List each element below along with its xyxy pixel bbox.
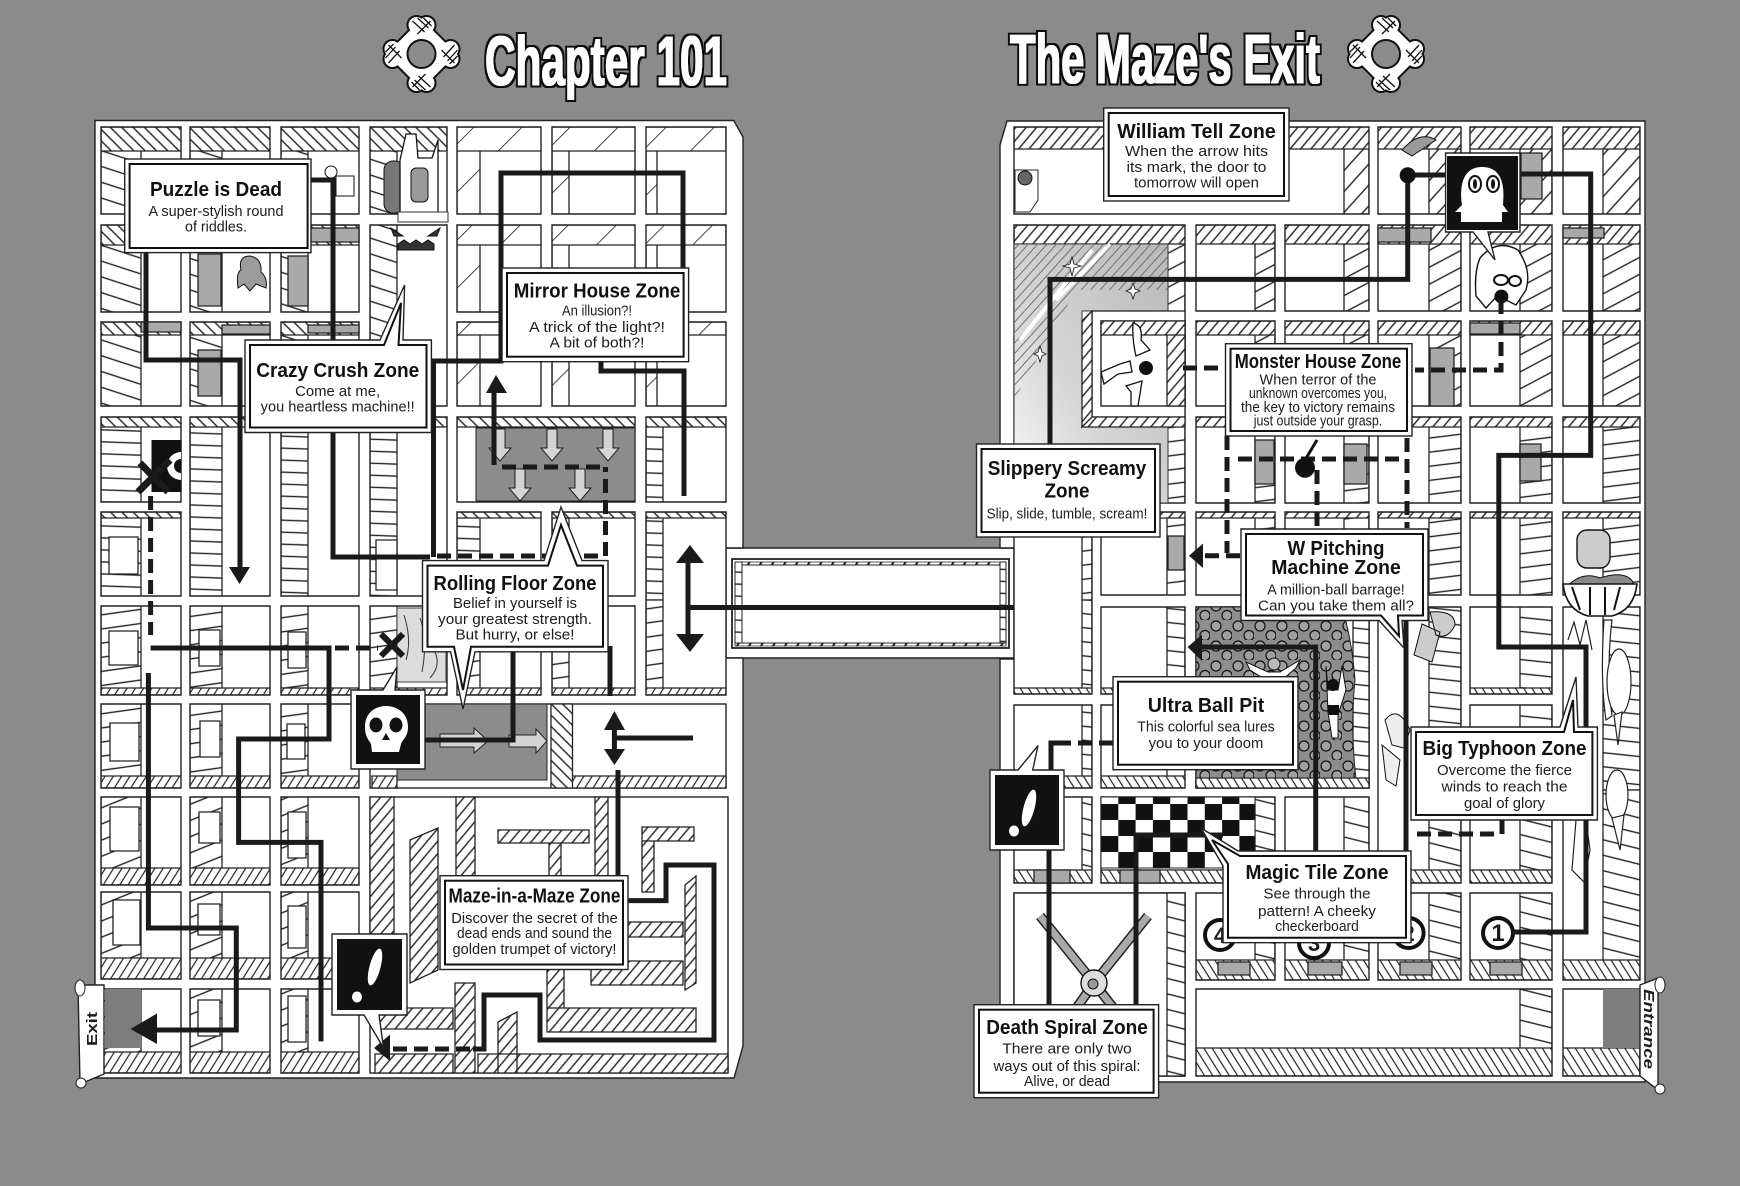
callout: Puzzle is Dead — [125, 159, 311, 253]
callout: Death Spiral Zone: There are only two — [1002, 1042, 1132, 1058]
callout: Big Typhoon Zone — [1411, 677, 1597, 820]
callout: William Tell Zone: tomorrow will open — [1134, 176, 1259, 192]
callout: Maze-in-a-Maze Zone: golden trumpet of victory! — [452, 942, 616, 958]
icon: octopus skull — [1476, 246, 1528, 308]
callout: Mirror House Zone: A bit of both?! — [550, 336, 644, 352]
route arrowheads right maze — [1188, 544, 1203, 661]
X mark drawn over the black marker — [138, 460, 170, 492]
callout: Crazy Crush Zone: Come at me, — [295, 384, 380, 400]
exit room shadow — [105, 989, 141, 1048]
callout: Monster House Zone: just outside your grasp. — [1253, 414, 1382, 430]
callout: Slippery Screamy Zone: Zone — [1044, 480, 1090, 502]
callout: Puzzle is Dead: Puzzle is Dead — [150, 179, 282, 201]
icon: grinning wall monster — [391, 228, 440, 250]
ball pit floor — [1196, 607, 1369, 788]
callout: Big Typhoon Zone: Overcome the fierce — [1437, 763, 1572, 779]
checkerboard tile floor — [1101, 797, 1255, 868]
callout: Slippery Screamy Zone: Slip, slide, tumble, scream! — [987, 507, 1147, 523]
route lines left maze — [146, 173, 714, 1049]
maze outer slab — [1000, 121, 1645, 1082]
rolling floor room lower — [370, 704, 726, 788]
numbered switches — [1205, 918, 1513, 958]
route line across the bridge — [688, 605, 1044, 610]
exit tab: Exit — [84, 1012, 101, 1046]
apple on shelf — [1015, 170, 1038, 212]
rolling floor room upper — [476, 428, 635, 501]
icon: exclamation marker left — [332, 934, 407, 1048]
callout: Magic Tile Zone: pattern! A cheeky — [1258, 904, 1377, 920]
numbered switches: 1 — [1491, 920, 1505, 947]
maze outer slab — [95, 120, 743, 1078]
icon: switch cube — [325, 166, 354, 196]
callout: Magic Tile Zone — [1201, 828, 1411, 943]
callout: W Pitching Machine Zone: Can you take them all? — [1258, 598, 1414, 614]
callout: Rolling Floor Zone: your greatest strength. — [438, 612, 592, 628]
panel: bridge connecting the two maze halves — [726, 548, 1014, 658]
callout: Death Spiral Zone: Alive, or dead — [1024, 1074, 1110, 1090]
callout: Crazy Crush Zone: you heartless machine!! — [261, 399, 415, 415]
route arrowheads and X mark left maze — [130, 375, 704, 1061]
callout: William Tell Zone: William Tell Zone — [1117, 121, 1276, 143]
numbered switches: 4 — [1214, 923, 1227, 948]
swimmers in the ball pit — [1246, 658, 1346, 738]
callout: Big Typhoon Zone: winds to reach the — [1440, 780, 1568, 796]
callout: Slippery Screamy Zone: Slippery Screamy — [988, 458, 1147, 480]
route lines right maze — [1049, 167, 1591, 1005]
panel: right maze half — [1000, 120, 1645, 1082]
icon: black marker with circle behind the X — [152, 440, 182, 492]
callout: Maze-in-a-Maze Zone — [440, 876, 628, 970]
entrance tab: Entrance — [1640, 989, 1657, 1069]
callout: Slippery Screamy Zone — [976, 444, 1160, 537]
slippery mirror floor — [1014, 244, 1168, 503]
callout: Monster House Zone: unknown overcomes you, — [1249, 386, 1387, 402]
entrance tab — [1640, 977, 1665, 1094]
callout: Big Typhoon Zone: goal of glory — [1464, 796, 1546, 812]
exit tab — [75, 980, 104, 1088]
callout: W Pitching Machine Zone — [1241, 529, 1428, 648]
callout: Rolling Floor Zone: Rolling Floor Zone — [434, 573, 596, 595]
callout: Mirror House Zone: A trick of the light?! — [529, 320, 665, 336]
callout: Magic Tile Zone: See through the — [1264, 887, 1370, 903]
callout: Crazy Crush Zone: Crazy Crush Zone — [256, 360, 419, 382]
callout: Magic Tile Zone: checkerboard — [1275, 919, 1359, 935]
inner maze-in-a-maze room — [370, 797, 728, 1073]
grey doors and ledges — [1034, 153, 1604, 975]
icon: ghost marker — [1446, 153, 1520, 260]
icon: skull marker — [351, 667, 425, 769]
callout: Magic Tile Zone: Magic Tile Zone — [1246, 862, 1388, 884]
callout: Death Spiral Zone: Death Spiral Zone — [986, 1017, 1148, 1039]
callout: W Pitching Machine Zone: A million-ball barrage! — [1267, 582, 1405, 598]
callout: Death Spiral Zone — [974, 1005, 1159, 1098]
callout: Maze-in-a-Maze Zone: Maze-in-a-Maze Zone — [448, 886, 620, 908]
room grid with hatched walls — [1014, 120, 1640, 1076]
callout: Monster House Zone: When terror of the — [1260, 373, 1376, 389]
falling players and equipment — [1382, 612, 1455, 786]
window panels on side walls — [109, 537, 397, 1042]
emblem: clasped hands left — [384, 17, 458, 91]
room grid with hatched walls — [101, 120, 726, 1080]
callout: Death Spiral Zone: ways out of this spiral: — [992, 1059, 1140, 1075]
numbered switches: 2 — [1402, 921, 1415, 946]
callout: Mirror House Zone — [502, 268, 689, 362]
emblem: clasped hands right — [1349, 17, 1423, 91]
icon: robot on tyre — [384, 134, 448, 222]
numbered switches: 3 — [1308, 931, 1320, 956]
callout: Crazy Crush Zone — [245, 285, 431, 432]
monster house inner room — [1082, 311, 1185, 427]
callout: Rolling Floor Zone: Belief in yourself is — [453, 596, 577, 612]
callout: Big Typhoon Zone: Big Typhoon Zone — [1422, 738, 1586, 760]
callout: Ultra Ball Pit: Ultra Ball Pit — [1148, 695, 1265, 717]
title: Chapter 101: Chapter 101 — [485, 22, 727, 100]
title: The Maze's Exit: The Maze's Exit — [1010, 20, 1320, 98]
callout: Ultra Ball Pit — [1113, 677, 1298, 770]
callout: Monster House Zone: the key to victory remains — [1241, 400, 1395, 416]
typhoon wind blobs — [1568, 620, 1631, 882]
death spiral room — [1014, 893, 1185, 1076]
callout: W Pitching Machine Zone: W Pitching — [1288, 538, 1384, 560]
callout: Ultra Ball Pit: This colorful sea lures — [1137, 719, 1275, 735]
entrance room shadow — [1603, 989, 1640, 1048]
callout: Mirror House Zone: An illusion?! — [562, 304, 632, 320]
icon: splat blob — [237, 256, 266, 291]
grey doors — [141, 228, 359, 396]
icon: exclamation marker right — [990, 746, 1064, 850]
callout: Rolling Floor Zone: But hurry, or else! — [456, 628, 574, 644]
panel: left maze half — [95, 120, 743, 1080]
callout: Monster House Zone — [1226, 344, 1412, 436]
water splash floor — [397, 608, 446, 682]
callout: Rolling Floor Zone — [422, 507, 608, 709]
typhoon fan robot — [1563, 530, 1637, 616]
callout: Monster House Zone: Monster House Zone — [1235, 351, 1401, 373]
callout: William Tell Zone — [1104, 108, 1289, 201]
callout: W Pitching Machine Zone: Machine Zone — [1271, 557, 1401, 579]
callout: William Tell Zone: its mark, the door to — [1126, 160, 1266, 176]
callout: Mirror House Zone: Mirror House Zone — [514, 281, 680, 303]
callout: Maze-in-a-Maze Zone: Discover the secret of the — [451, 911, 618, 927]
callout: William Tell Zone: When the arrow hits — [1125, 144, 1268, 160]
callout: Maze-in-a-Maze Zone: dead ends and sound the — [457, 926, 612, 942]
callout: Ultra Ball Pit: you to your doom — [1149, 736, 1263, 752]
callout: Puzzle is Dead: A super-stylish round — [148, 204, 284, 220]
arrow stuck in wall — [1402, 137, 1436, 156]
callout: Puzzle is Dead: of riddles. — [185, 220, 247, 236]
